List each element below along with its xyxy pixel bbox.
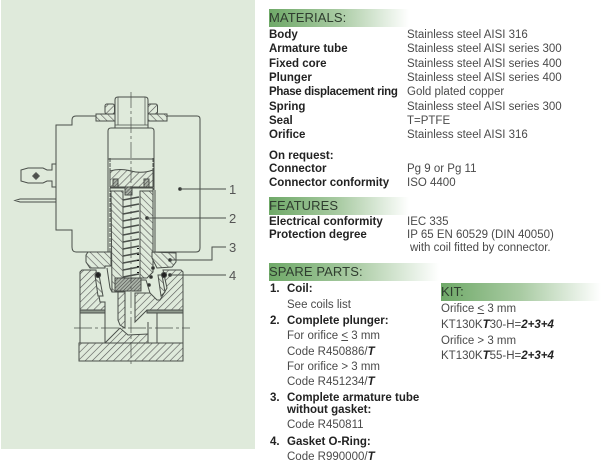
callout 2 [146,211,236,226]
valve body [79,268,183,361]
spare parts list [270,283,419,463]
features table: Electrical conformity [269,216,383,228]
features table: Protection degree [269,229,367,241]
heading: features [269,197,409,215]
features table: IEC 335 [407,216,449,228]
materials table: Stainless steel AISI series 300 [407,43,562,55]
kit list: Orifice > 3 mm [441,335,516,347]
spare parts list: Code R450811 [287,419,364,431]
callout 1: 1 [229,182,236,197]
materials table: Seal [269,115,293,127]
spare parts list: 1. [270,283,280,295]
materials table: Spring [269,101,305,113]
materials table: Stainless steel AISI series 400 [407,72,562,84]
heading: features: FEATURES [269,198,338,213]
spare parts list: Code R990000/T [287,451,375,463]
materials table: Stainless steel AISI 316 [407,29,528,41]
materials table: Fixed core [269,58,327,70]
materials table [269,29,562,189]
features table: with coil fitted by connector. [410,242,551,254]
spare parts list: 4. [270,436,280,448]
spare parts list: without gasket: [287,404,371,416]
materials table: T=PTFE [407,115,450,127]
materials table: Pg 9 or Pg 11 [407,163,476,175]
kit list [441,303,554,362]
materials table: Stainless steel AISI series 300 [407,101,562,113]
materials table: On request: [269,150,334,162]
spare parts list: Code R451234/T [287,376,375,388]
callout 3 [169,240,236,261]
callout 2: 2 [229,211,236,226]
callout 3: 3 [229,240,236,255]
heading: spare parts: SPARE PARTS: [269,264,363,279]
spare parts list: For orifice > 3 mm [287,361,380,373]
spare parts list: 3. [270,392,280,404]
spare parts list: 2. [270,315,280,327]
kit list: Orifice < 3 mm [441,303,516,315]
materials table: Connector conformity [269,177,389,189]
panel: valve cross-section drawing [1,0,255,449]
heading: materials [269,9,409,27]
materials table: Stainless steel AISI series 400 [407,58,562,70]
heading: materials: MATERIALS: [269,10,346,25]
materials table: Connector [269,163,326,175]
kit list: KT130KT55-H=2+3+4 [441,350,554,362]
materials table: Plunger [269,72,312,84]
connector tab and pin [15,164,56,202]
features table [269,216,554,254]
materials table: ISO 4400 [407,177,456,189]
flange [86,252,176,268]
spring [123,187,139,277]
materials table: Stainless steel AISI 316 [407,129,528,141]
top nut and washer [96,97,167,128]
spare parts list: See coils list [287,299,351,311]
heading: kit: KIT: [441,284,464,299]
spare parts list: Coil: [287,283,313,295]
kit list: KT130KT30-H=2+3+4 [441,319,554,331]
materials table: Phase displacement ring [269,86,398,98]
spare parts list: Gasket O-Ring: [287,436,371,448]
spare parts list: Complete plunger: [287,315,389,327]
materials table: Orifice [269,129,305,141]
center lines [74,92,190,366]
armature tube [108,128,155,252]
materials table: Gold plated copper [407,86,504,98]
coil outline [56,116,200,252]
callout 4 [169,268,236,283]
callout 1 [179,182,236,197]
spare parts list: Complete armature tube [287,392,419,404]
heading: kit [441,283,601,301]
features table: IP 65 EN 60529 (DIN 40050) [407,229,554,241]
spare parts list: Code R450886/T [287,346,375,358]
spare parts list: For orifice < 3 mm [287,330,380,342]
materials table: Body [269,29,298,41]
callout 4: 4 [229,268,236,283]
heading: spare parts [269,263,439,281]
o-rings and plunger seal [95,267,167,291]
fixed core [110,170,153,188]
materials table: Armature tube [269,43,348,55]
plunger [111,191,153,292]
